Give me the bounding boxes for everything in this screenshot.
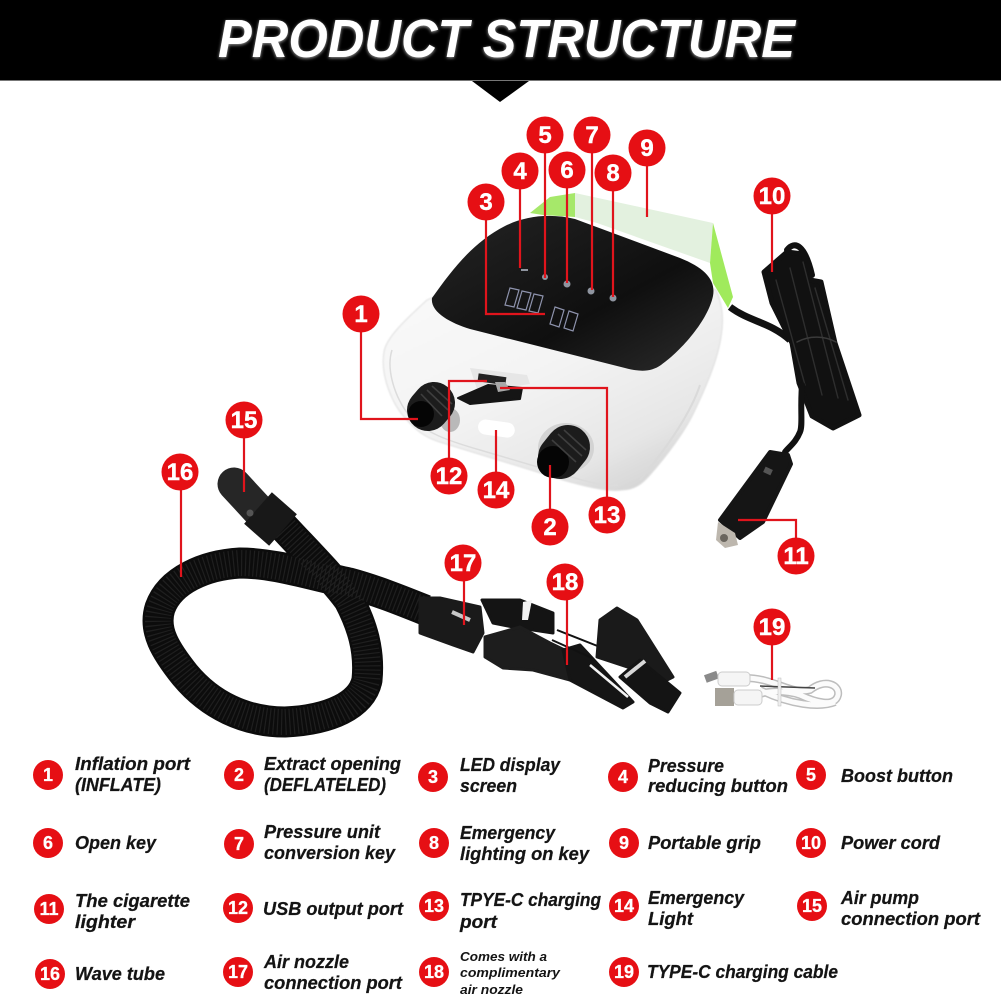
legend item 14: 14 [614, 896, 634, 916]
legend item 2: 2 [234, 765, 244, 785]
legend item 8: 8 [429, 833, 439, 853]
emergency light [477, 419, 516, 439]
control buttons [521, 269, 616, 302]
legend item 19: 19 [614, 962, 634, 982]
legend item 8: lighting on key [460, 843, 591, 864]
legend item 19: TYPE-C charging cable [647, 961, 838, 982]
numbered markers on the product: 10 [759, 183, 785, 210]
legend item 1: Inflation port [75, 753, 191, 774]
legend item 7: 7 [234, 834, 244, 854]
legend item 6: 6 [43, 833, 53, 853]
legend item 17: connection port [264, 972, 403, 993]
legend item 14 [609, 887, 746, 929]
lower nozzle [620, 660, 680, 712]
legend item 11: The cigarette [75, 890, 190, 911]
legend item 2: (DEFLATELED) [264, 774, 386, 795]
numbered markers on the product: 7 [585, 122, 599, 149]
legend item 9: Portable grip [648, 832, 761, 853]
legend item 13: 13 [424, 896, 444, 916]
deflate port [537, 423, 594, 478]
header banner [0, 0, 1001, 102]
legend item 1 [33, 753, 191, 795]
legend item 15: connection port [841, 908, 981, 929]
legend item 18: Comes with a [460, 950, 547, 964]
power cord stub [730, 307, 790, 340]
numbered markers on the product: 1 [354, 301, 368, 328]
top nozzle [597, 608, 673, 680]
legend item 9 [609, 828, 761, 858]
legend item 7: Pressure unit [264, 821, 381, 842]
legend item 6 [33, 828, 158, 858]
pump body [383, 240, 723, 491]
cigarette lighter plug [716, 452, 791, 548]
numbered markers on the product: 13 [594, 502, 620, 529]
numbered markers on the product: 19 [759, 614, 785, 641]
legend item 3: screen [460, 775, 517, 796]
legend item 12: USB output port [263, 898, 404, 919]
legend item 4 [608, 755, 788, 796]
legend item 6: Open key [75, 832, 158, 853]
carry handle [530, 193, 733, 308]
legend item 13 [419, 889, 601, 932]
legend item 18: complimentary [460, 966, 561, 980]
legend item 2: Extract opening [264, 753, 401, 774]
legend item 18: 18 [424, 962, 444, 982]
legend item 11 [34, 890, 190, 932]
coiled power cord [764, 245, 859, 452]
legend item 13: port [459, 911, 498, 932]
USB charging cable [704, 671, 838, 706]
numbered markers on the product: 6 [560, 157, 574, 184]
numbered markers on the product: 18 [552, 569, 578, 596]
air hose [158, 484, 425, 722]
numbered markers on the product [162, 116, 814, 646]
numbered markers on the product: 3 [479, 189, 493, 216]
numbered markers on the product: 9 [640, 135, 654, 162]
pump unit [383, 193, 790, 491]
legend item 12 [223, 893, 404, 923]
legend item 15: 15 [802, 896, 822, 916]
numbered markers on the product: 5 [538, 122, 552, 149]
legend item 1: 1 [43, 765, 53, 785]
numbered markers on the product: 17 [450, 550, 476, 577]
legend item 8: Emergency [460, 822, 557, 843]
legend item 3: 3 [428, 767, 438, 787]
legend item 16 [35, 959, 165, 989]
legend item 4: 4 [618, 767, 628, 787]
legend item 5: Boost button [841, 765, 953, 786]
legend item 7 [224, 821, 397, 863]
large nozzle [485, 627, 575, 680]
legend item 18: air nozzle [460, 983, 523, 997]
black control panel [432, 216, 713, 371]
legend item 3: LED display [460, 754, 562, 775]
numbered markers on the product: 8 [606, 160, 620, 187]
legend item 14: Emergency [648, 887, 746, 908]
legend item 10: 10 [801, 833, 821, 853]
USB and Type-C ports with cover [458, 368, 530, 404]
legend item 10: Power cord [841, 832, 941, 853]
legend item 15: Air pump [840, 887, 919, 908]
legend item 17 [223, 951, 403, 993]
legend item 19 [609, 957, 838, 987]
legend item 9: 9 [619, 833, 629, 853]
legend item 13: TPYE-C charging [460, 889, 601, 910]
numbered markers on the product: 16 [167, 459, 193, 486]
legend item 14: Light [648, 908, 694, 929]
legend item 18 [419, 950, 561, 997]
legend item 17: Air nozzle [263, 951, 349, 972]
legend item 4: Pressure [648, 755, 724, 776]
legend item 17: 17 [228, 962, 248, 982]
hose connector 15 [234, 484, 283, 530]
numbered markers on the product: 4 [513, 158, 527, 185]
legend item 12: 12 [228, 898, 248, 918]
numbered markers on the product: 2 [543, 514, 557, 541]
legend item 2 [224, 753, 401, 795]
numbered markers on the product: 11 [783, 543, 809, 570]
legend item 4: reducing button [648, 775, 788, 796]
legend item 16: 16 [40, 964, 60, 984]
legend item 3 [418, 754, 562, 796]
legend item 11: lighter [75, 911, 137, 932]
legend item 7: conversion key [264, 842, 397, 863]
callout lines [181, 153, 796, 680]
inflate port [408, 386, 460, 432]
numbered markers on the product: 12 [436, 463, 462, 490]
LED display [505, 288, 578, 331]
legend item 11: 11 [39, 899, 59, 919]
legend item 16: Wave tube [75, 963, 165, 984]
legend item 5: 5 [806, 765, 816, 785]
legend item 10 [796, 828, 941, 858]
legend [33, 753, 981, 997]
legend item 1: (INFLATE) [75, 774, 161, 795]
numbered markers on the product: 14 [483, 477, 510, 504]
nozzle set [420, 598, 680, 712]
numbered markers on the product: 15 [231, 407, 257, 434]
legend item 5 [796, 760, 953, 790]
legend item 8 [419, 822, 591, 864]
legend item 15 [797, 887, 981, 929]
elbow adapter [420, 598, 483, 652]
title: PRODUCT STRUCTURE [218, 9, 797, 69]
